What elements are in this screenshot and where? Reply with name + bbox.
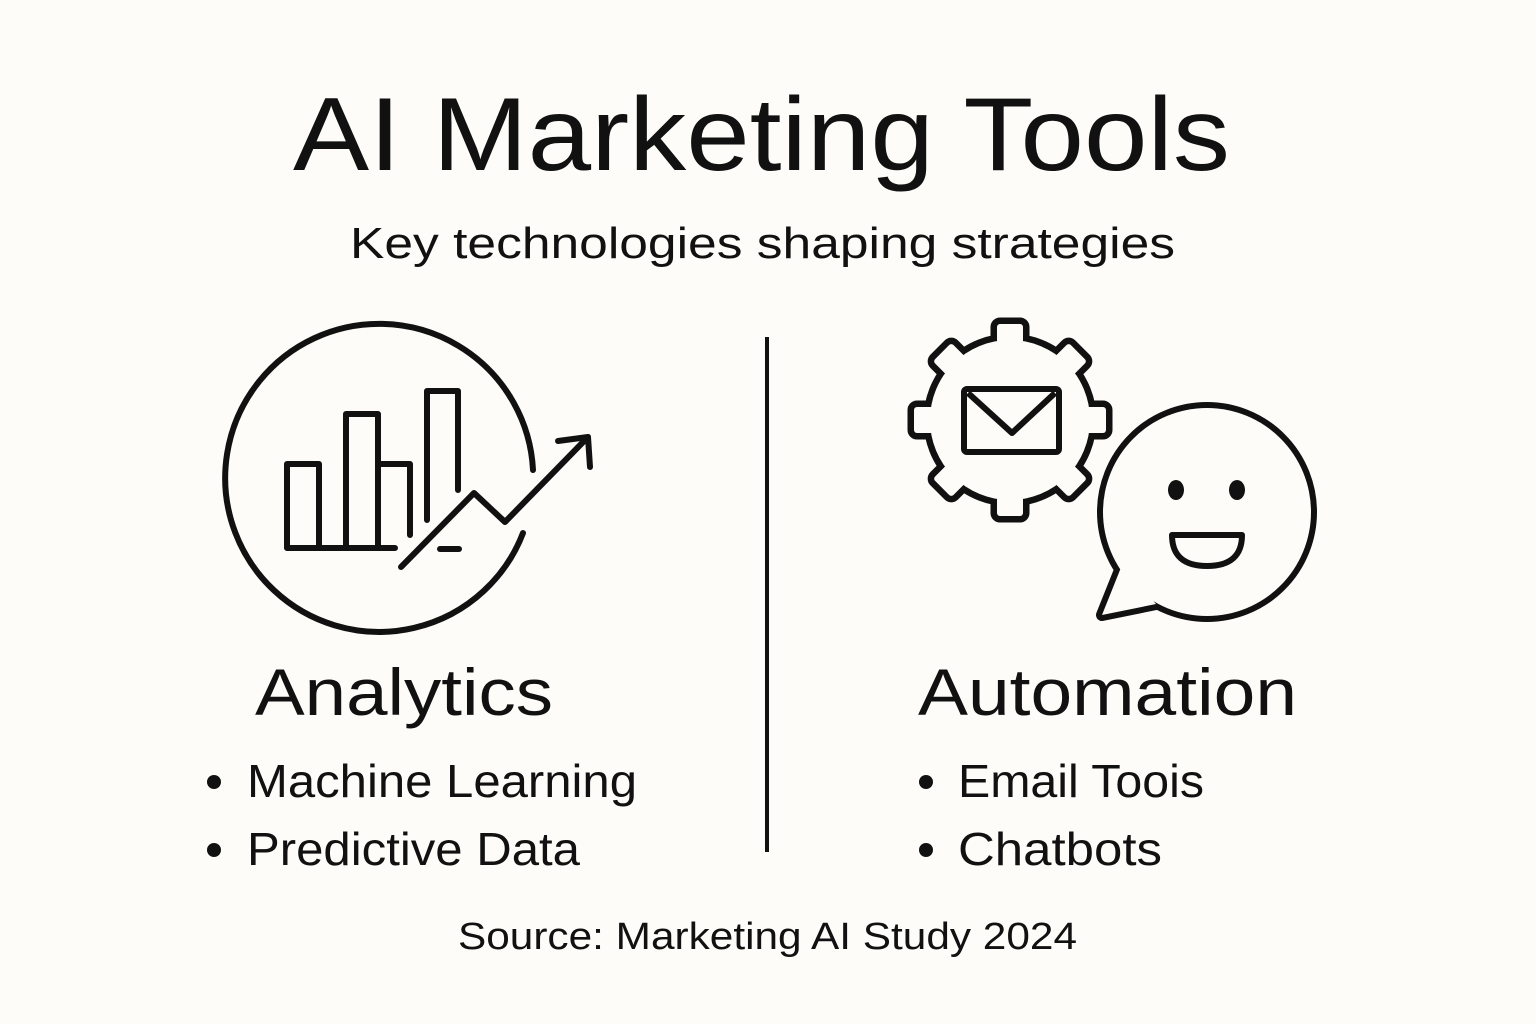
source: Source: Marketing AI Study 2024	[458, 916, 1077, 958]
list: automation: Email Toois	[958, 755, 1204, 807]
divider	[765, 337, 769, 852]
list: automation: Chatbots	[958, 823, 1162, 875]
list: analytics: Predictive Data	[247, 823, 580, 875]
list: analytics	[207, 755, 637, 875]
heading: Automation: Automation	[918, 655, 1297, 729]
list: analytics: Machine Learning	[247, 755, 637, 807]
list: automation	[919, 755, 1204, 875]
heading: Analytics: Analytics	[255, 655, 553, 729]
title: AI Marketing Tools	[293, 77, 1230, 193]
icon: analytics chart	[225, 324, 590, 632]
subtitle: Key technologies shaping strategies	[350, 219, 1175, 268]
icon: gear with envelope	[914, 324, 1106, 516]
icon: chatbot speech bubble	[1102, 408, 1311, 616]
